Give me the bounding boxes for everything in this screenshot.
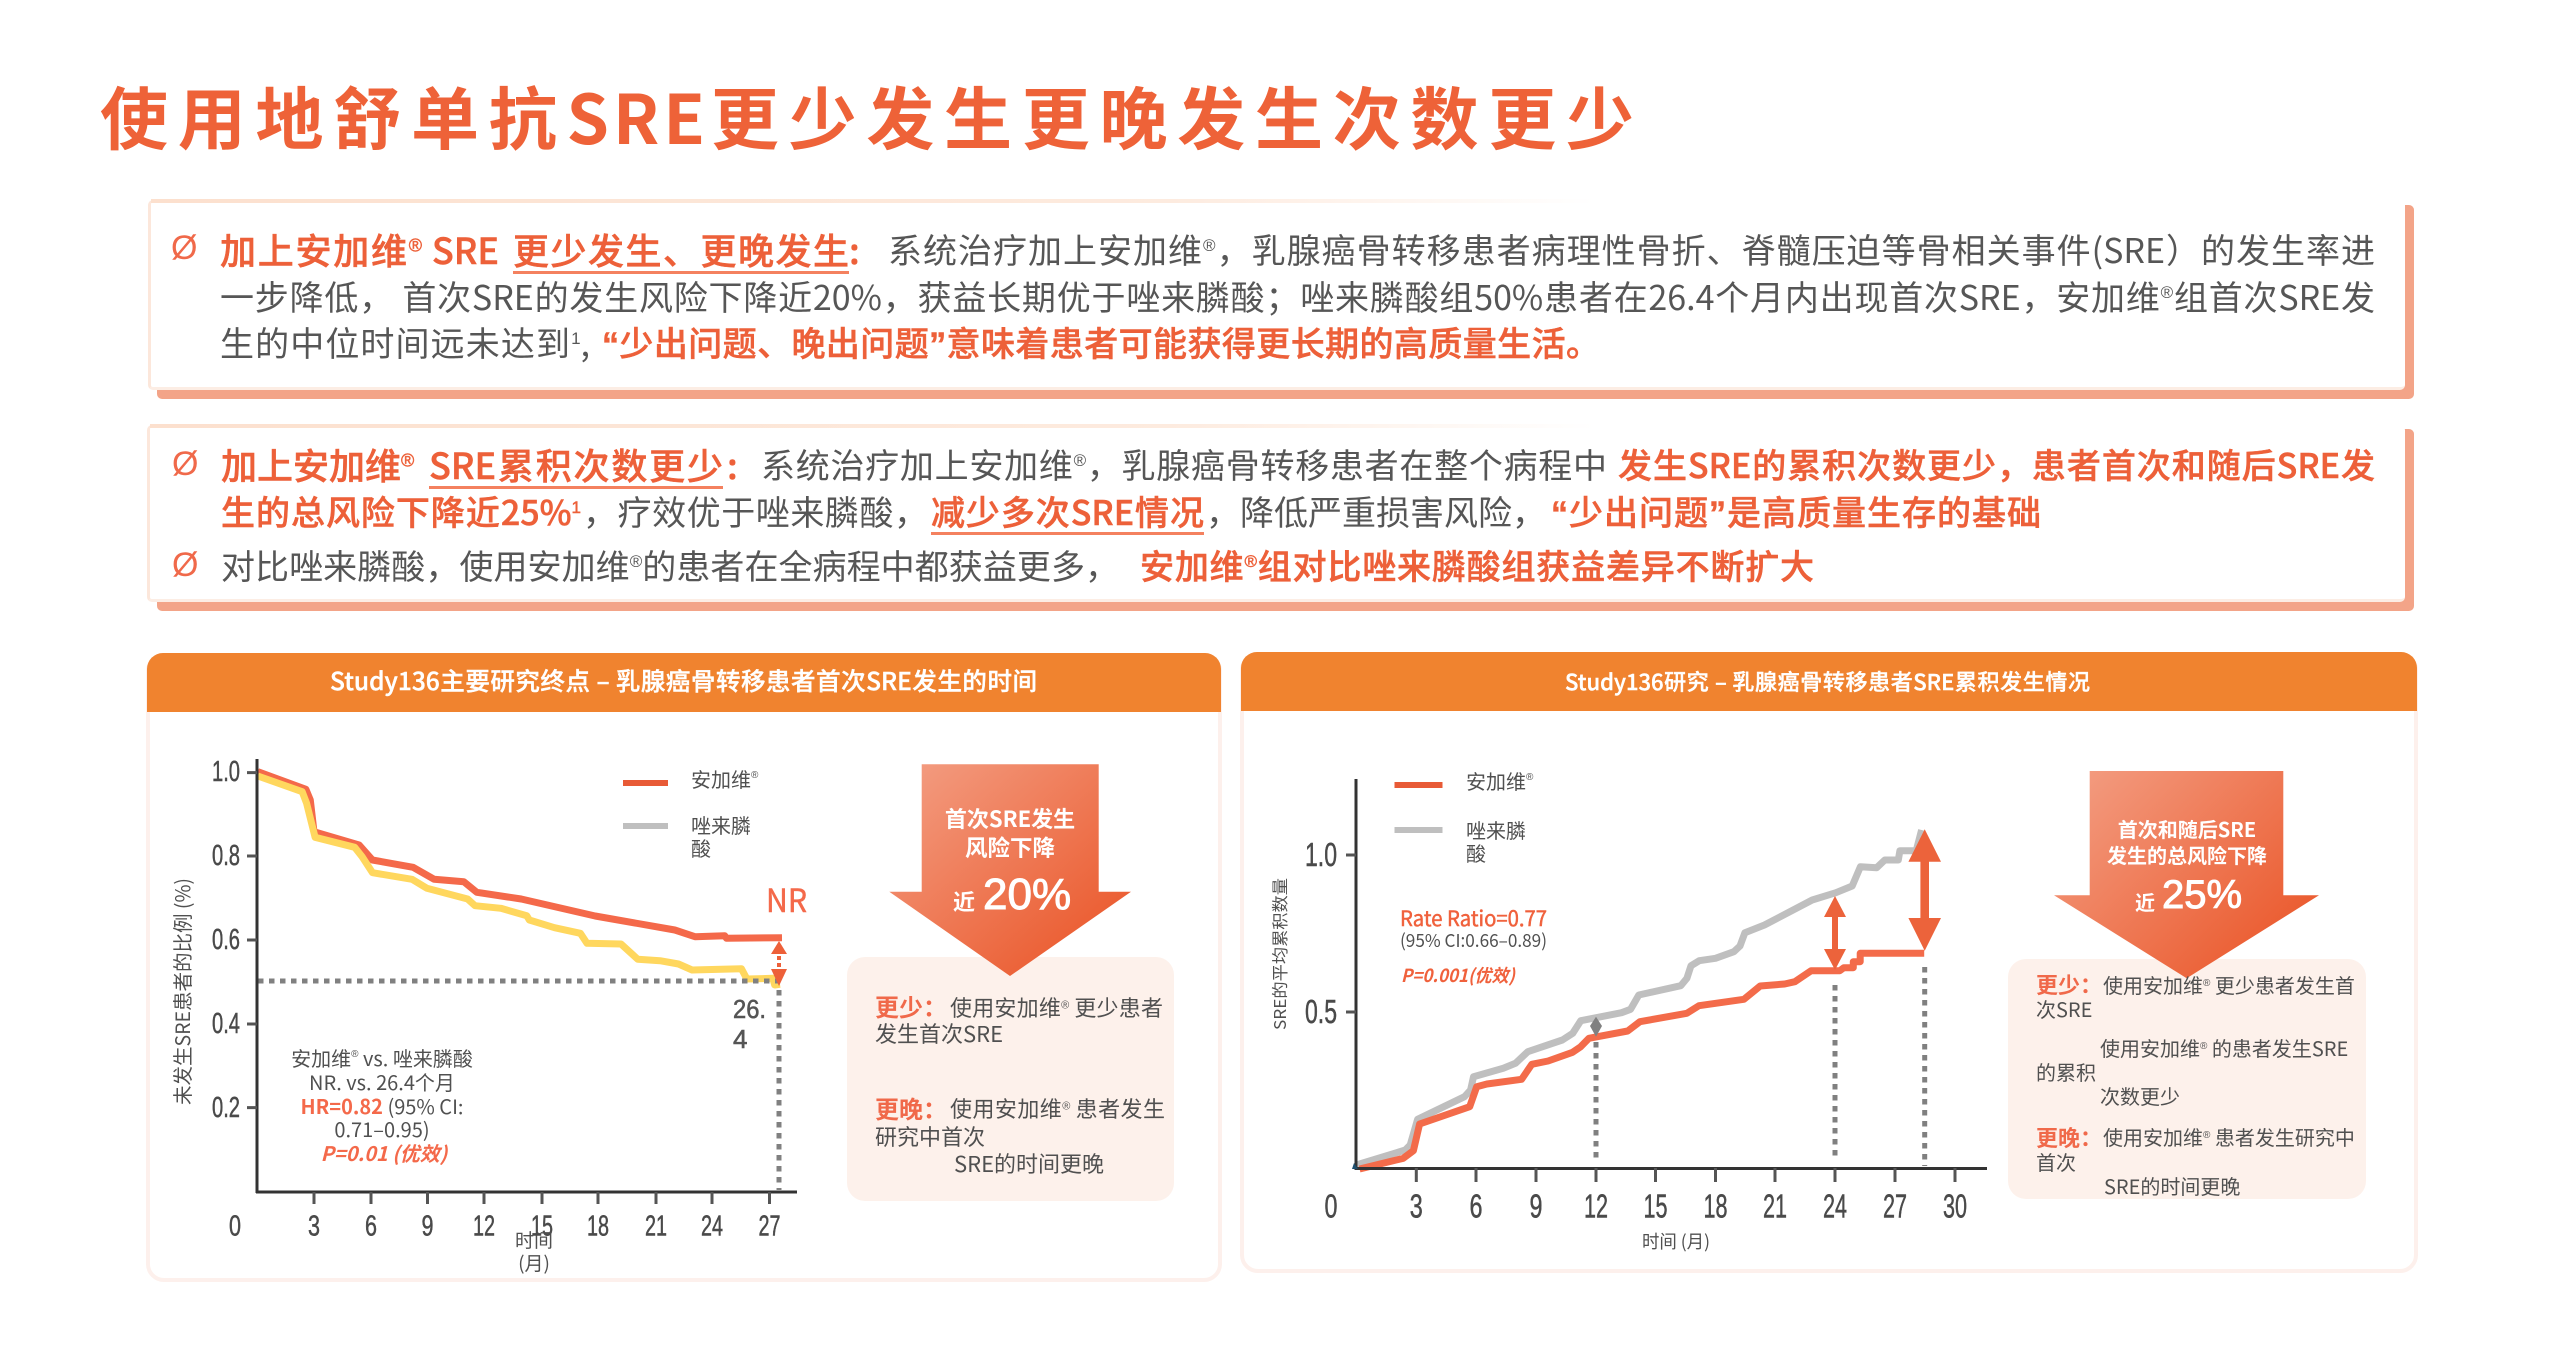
near label: 近 — [953, 885, 975, 917]
arrow: difference at 12 months — [1590, 1017, 1602, 1037]
legend — [1394, 766, 1534, 867]
statistics — [1400, 903, 1547, 988]
statistics: 0.71–0.95) — [334, 1114, 430, 1143]
x axis numbers: 6 — [365, 1210, 377, 1242]
x axis numbers: 21 — [645, 1210, 667, 1242]
x axis numbers: 27 — [758, 1210, 780, 1242]
line 2: 发生的总风险下降 — [2107, 840, 2267, 869]
arrow: 25% risk reduction — [2054, 771, 2319, 978]
near label: 近 — [2135, 887, 2155, 916]
text: line 2 grey: ，降低严重损害风险， — [1206, 486, 1546, 535]
y axis label: 未发生SRE患者的比例 (%) — [167, 878, 196, 1105]
y axis numbers: 1.0 — [212, 756, 240, 788]
legend: 安加维 — [1466, 766, 1526, 795]
text: line 2 underlined: 减少多次SRE情况 — [931, 486, 1204, 535]
legend: 酸 — [1466, 838, 1486, 867]
y axis numbers: 0.5 — [1305, 993, 1337, 1030]
value: 25% — [2162, 873, 2242, 917]
y axis numbers: 0.4 — [212, 1008, 240, 1040]
x axis numbers: 15 — [531, 1210, 553, 1242]
text: line 2 grey: ，疗效优于唑来膦酸， — [583, 486, 928, 535]
x axis numbers: 18 — [1704, 1188, 1728, 1224]
statistics: P=0.001(优效) — [1401, 962, 1516, 988]
x axis numbers: 6 — [1470, 1188, 1482, 1224]
x axis numbers: 18 — [587, 1210, 609, 1242]
heading: cumulative fewer: 加上安加维® — [221, 438, 414, 490]
legend: 安加维 — [691, 764, 751, 793]
y axis numbers: 0.2 — [212, 1092, 240, 1124]
x axis numbers: 12 — [473, 1210, 495, 1242]
statistics — [291, 1043, 473, 1167]
x axis numbers: 9 — [422, 1210, 434, 1242]
heading: cumulative fewer: : — [727, 438, 738, 490]
text: line 2: 一步降低， 首次SRE的发生风险下降近20%，获益长期优于唑来膦酸；唑来膦酸组50%患者在26.4个月内出现首次SRE，安加维®组首次SRE发 — [220, 271, 2375, 320]
text: line 2 highlight: 生的总风险下降近25%1 — [221, 486, 581, 535]
text: later line 2: 首次 — [2036, 1147, 2076, 1176]
statistics: Rate Ratio=0.77 — [1400, 903, 1547, 933]
axes — [1346, 779, 1987, 1182]
x axis numbers: 0 — [1324, 1188, 1338, 1224]
legend: 酸 — [691, 833, 711, 862]
x axis numbers: 0 — [229, 1210, 241, 1242]
bullet: Ø — [172, 445, 198, 483]
statistics: HR=0.82 (95% CI: — [300, 1091, 464, 1120]
legend — [623, 764, 759, 862]
arrow: difference at end — [1908, 829, 1941, 951]
text: line 1 grey: 系统治疗加上安加维®，乳腺癌骨转移患者在整个病程中 — [761, 439, 1607, 488]
text: line 2 quote: “少出问题”是高质量生存的基础 — [1551, 486, 2041, 535]
box: left findings — [847, 957, 1174, 1201]
panel header: time to first SRE — [147, 653, 1221, 712]
panel header: cumulative SRE — [1241, 652, 2417, 711]
text: later line 1: 使用安加维® 患者发生研究中 — [2103, 1122, 2355, 1151]
text: later line 1: 使用安加维® 患者发生 — [950, 1092, 1165, 1124]
header title: Study136主要研究终点 – 乳腺癌骨转移患者首次SRE发生的时间 — [330, 663, 1037, 698]
y axis numbers: 0.8 — [212, 840, 240, 872]
panel: cumulative SRE summary — [147, 424, 2414, 611]
text: cumulative line 2: 的累积 — [2036, 1057, 2096, 1086]
statistics: ® — [351, 1049, 359, 1060]
text: line 3 highlight: 安加维®组对比唑来膦酸组获益差异不断扩大 — [1140, 540, 1814, 589]
text: fewer line 1: 使用安加维® 更少患者发生首 — [2103, 970, 2355, 999]
chart: cumulative SRE — [1267, 766, 1987, 1254]
origin marker — [1352, 1163, 1358, 1169]
x axis label: 时间 — [515, 1226, 553, 1253]
axes — [247, 759, 797, 1204]
x axis numbers — [1324, 1188, 1967, 1224]
heading: cumulative fewer — [221, 438, 738, 490]
x axis numbers: 27 — [1883, 1188, 1907, 1224]
x axis numbers: 3 — [1410, 1188, 1423, 1224]
statistics: vs. 唑来膦酸 — [359, 1043, 473, 1072]
curve: denosumab-line yellow and red — [258, 772, 782, 985]
statistics: P=0.01 (优效) — [321, 1138, 449, 1167]
x axis numbers — [229, 1210, 780, 1242]
heading: cumulative fewer: SRE累积次数更少 — [429, 438, 723, 490]
NR label: NR — [766, 876, 807, 922]
text: later line 2: 研究中首次 — [875, 1120, 985, 1152]
x axis label — [515, 1226, 553, 1276]
text: line 3 grey: 生的中位时间远未达到1, — [220, 317, 590, 366]
legend: 唑来膦 — [691, 810, 751, 839]
legend: ® — [1526, 772, 1534, 783]
line 1: 首次SRE发生 — [945, 802, 1075, 834]
line 1: 首次和随后SRE — [2118, 814, 2256, 843]
text: line 3 grey: 对比唑来膦酸，使用安加维®的患者在全病程中都获益更多， — [221, 540, 1119, 589]
y axis label: SRE的平均累积数量 — [1267, 878, 1291, 1030]
y axis numbers — [1305, 836, 1337, 1030]
text: line 1 highlight: 发生SRE的累积次数更少，患者首次和随后SRE发 — [1618, 439, 2375, 488]
x axis numbers: 24 — [1823, 1188, 1847, 1224]
panel: cumulative SRE — [1240, 652, 2418, 1273]
findings text: right — [2036, 968, 2355, 1200]
text: line 3 highlight: “少出问题、晚出问题”意味着患者可能获得更长期的高质量生活。 — [602, 317, 1600, 366]
arrow: 20% risk reduction — [889, 764, 1131, 976]
bullet: Ø — [171, 229, 197, 267]
y axis numbers — [212, 756, 240, 1124]
y axis numbers: 0.6 — [212, 924, 240, 956]
text: cumulative line 3: 次数更少 — [2100, 1081, 2180, 1110]
statistics: NR. vs. 26.4个月 — [309, 1067, 455, 1096]
x axis numbers: 30 — [1943, 1188, 1967, 1224]
y axis numbers: 1.0 — [1305, 836, 1337, 873]
text: later line 3: SRE的时间更晚 — [954, 1147, 1104, 1179]
label: later: 更晚： — [875, 1090, 947, 1125]
median value: 4 — [733, 1024, 747, 1054]
x axis numbers: 9 — [1530, 1188, 1542, 1224]
title: 使用地舒单抗SRE更少发生更晚发生次数更少 — [100, 65, 1642, 164]
curve: zoledronic acid grey — [1356, 830, 1922, 1165]
x axis numbers: 15 — [1644, 1188, 1668, 1224]
text: cumulative line 1: 使用安加维® 的患者发生SRE — [2100, 1033, 2348, 1062]
label: fewer: 更少： — [2036, 968, 2102, 1000]
panel: fewer and later SRE summary — [148, 199, 2414, 399]
heading: SRE fewer and later: 加上安加维® SRE — [220, 223, 499, 275]
x axis numbers: 3 — [308, 1210, 320, 1242]
text: line 1: 系统治疗加上安加维®，乳腺癌骨转移患者病理性骨折、脊髓压迫等骨相关事件(SRE）的发生率进 — [888, 224, 2375, 273]
curve: denosumab red — [1360, 953, 1924, 1169]
header title: Study136研究 – 乳腺癌骨转移患者SRE累积发生情况 — [1565, 665, 2090, 697]
median value — [733, 994, 766, 1054]
x axis label: (月) — [518, 1249, 550, 1276]
x axis numbers: 21 — [1763, 1188, 1787, 1224]
text: fewer line 2: 发生首次SRE — [875, 1017, 1003, 1049]
arrow text: 20% — [945, 802, 1075, 919]
value: 20% — [983, 870, 1071, 919]
box: right findings — [2008, 959, 2366, 1199]
panel: time to first SRE — [146, 653, 1222, 1282]
label: later: 更晚： — [2036, 1121, 2102, 1153]
x axis numbers: 24 — [701, 1210, 723, 1242]
statistics: 安加维 — [291, 1043, 351, 1072]
chart: time to first SRE — [167, 756, 807, 1276]
text: later line 3: SRE的时间更晚 — [2104, 1171, 2240, 1200]
arrow: difference — [771, 941, 787, 986]
text: fewer line 2: 次SRE — [2036, 994, 2092, 1023]
line 2: 风险下降 — [965, 831, 1055, 863]
heading: SRE fewer and later: : — [849, 223, 860, 275]
bullet: Ø — [172, 546, 198, 584]
median dashed lines — [258, 981, 779, 1190]
legend: ® — [751, 770, 759, 781]
findings text: left — [875, 988, 1165, 1179]
legend: 唑来膦 — [1466, 815, 1526, 844]
x axis label: 时间 (月) — [1642, 1228, 1710, 1254]
heading: SRE fewer and later: 更少发生、更晚发生 — [513, 223, 849, 275]
statistics: (95% CI:0.66–0.89) — [1400, 927, 1547, 953]
label: fewer: 更少： — [875, 988, 947, 1023]
time-point dashed lines — [1596, 967, 1925, 1166]
x axis numbers: 12 — [1584, 1188, 1608, 1224]
heading: SRE fewer and later — [220, 223, 860, 275]
text: fewer line 1: 使用安加维® 更少患者 — [950, 991, 1163, 1023]
arrow: difference at 24 months — [1824, 896, 1846, 970]
median value: 26. — [733, 994, 766, 1024]
arrow text: 25% — [2107, 814, 2267, 917]
